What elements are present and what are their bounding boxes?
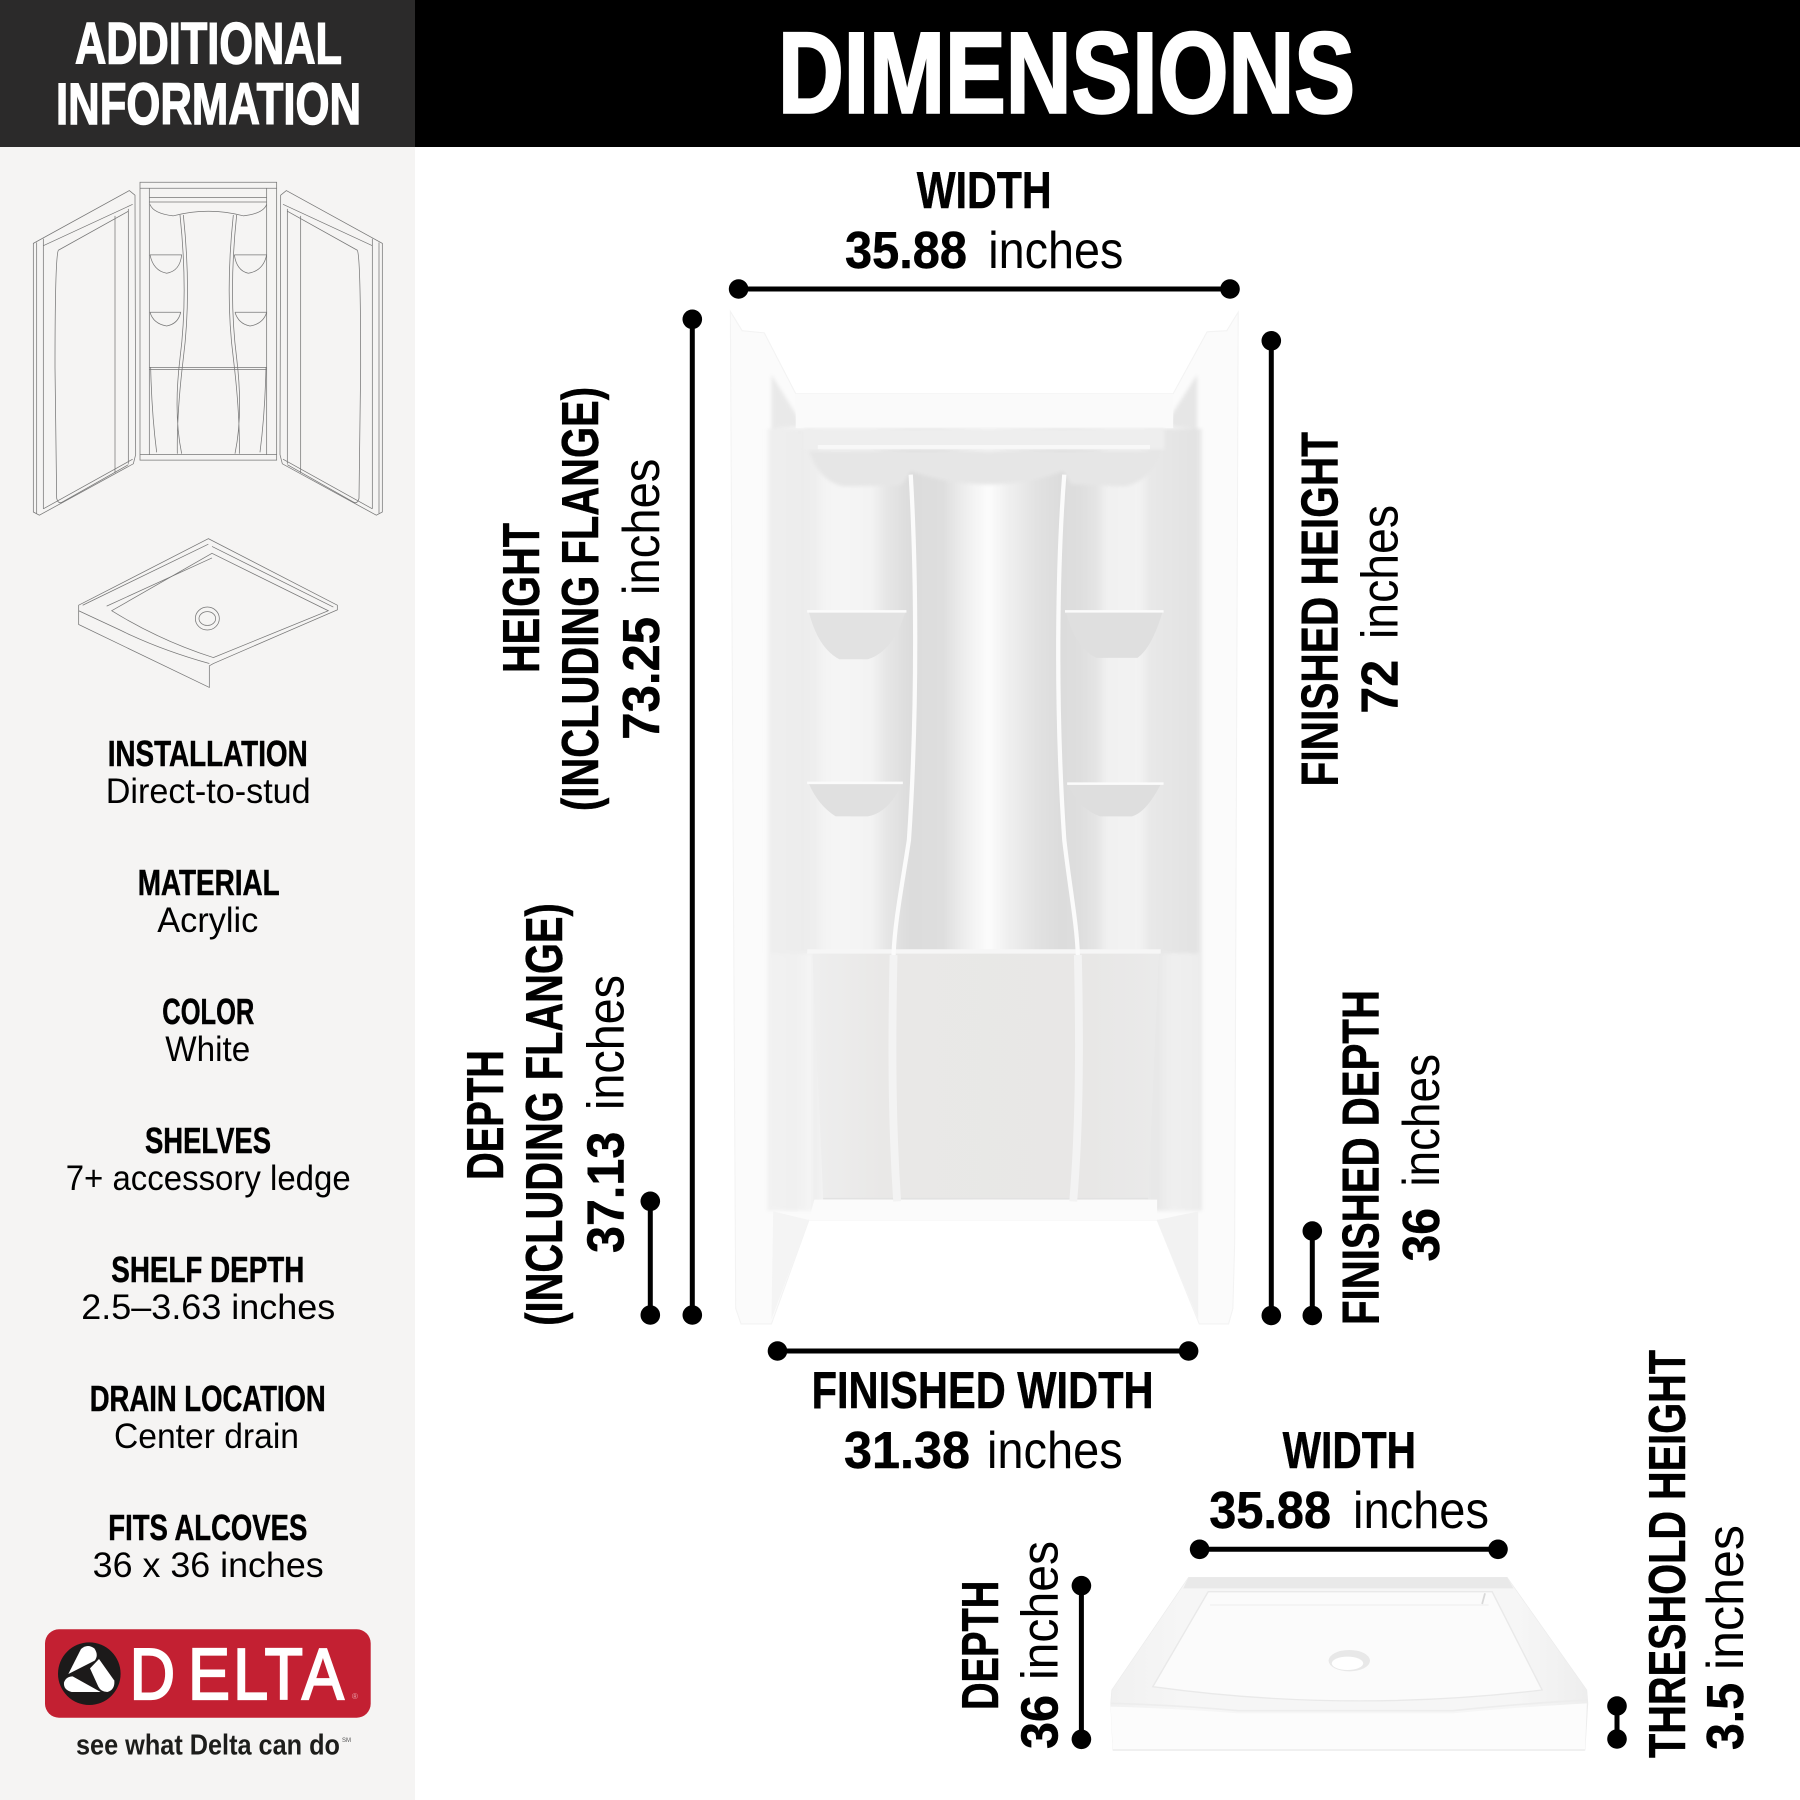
- drain: [1329, 1650, 1370, 1671]
- label: base depth: DEPTH: [952, 1581, 1010, 1710]
- label: width 35.88 inches: WIDTH: [917, 162, 1052, 220]
- line drawing: shower base: [79, 539, 337, 687]
- header: additional information: INFORMATION: [56, 72, 361, 137]
- spec: material: [138, 862, 280, 940]
- delta logo: [45, 1629, 371, 1718]
- spec: fits alcoves: 36 x 36 inches: [93, 1546, 324, 1585]
- dimension line: height including flange: [682, 310, 702, 1325]
- molded seams upper: [894, 475, 1078, 955]
- shelf top edges: [807, 611, 1164, 784]
- spec: shelves: 7+ accessory ledge: [66, 1159, 351, 1198]
- label: base width: [1209, 1422, 1489, 1540]
- label: base width: WIDTH: [1283, 1422, 1416, 1480]
- spec: shelf depth: [81, 1249, 335, 1327]
- dimension line: finished depth: [1302, 1221, 1322, 1325]
- header: additional information: [0, 0, 415, 147]
- lower left shelf: [809, 784, 902, 816]
- upper right shelf: [1066, 612, 1162, 658]
- label: height including flange: [493, 387, 671, 811]
- spec: shelf depth: SHELF DEPTH: [111, 1249, 304, 1290]
- label: depth including flange: (INCLUDING FLANGE): [516, 903, 574, 1326]
- upper left shelf: [809, 612, 905, 659]
- label: width 35.88 inches: 35.88: [845, 222, 967, 280]
- delta logo: ®: [352, 1692, 358, 1701]
- label: threshold height: [1639, 1350, 1755, 1758]
- label: depth including flange: DEPTH: [457, 1050, 515, 1180]
- dimension line: width: [729, 279, 1240, 299]
- dimension line: base width: [1190, 1540, 1508, 1559]
- label: finished depth: [1332, 990, 1451, 1325]
- label: finished width: [812, 1362, 1154, 1480]
- dimension line: base depth: [1072, 1576, 1091, 1749]
- delta logo: DELTA: [130, 1635, 344, 1715]
- spec: fits alcoves: [93, 1507, 324, 1585]
- spec: shelf depth: 2.5–3.63 inches: [81, 1288, 335, 1327]
- label: base depth: 36: [1012, 1695, 1070, 1749]
- spec: installation: INSTALLATION: [108, 733, 308, 774]
- sidebar background: [0, 147, 415, 1800]
- label: finished height: [1291, 432, 1409, 786]
- lower side returns: [771, 1211, 809, 1319]
- line drawing: wall panels: [33, 182, 382, 515]
- spec: shelves: [66, 1120, 351, 1198]
- spec: drain location: DRAIN LOCATION: [90, 1378, 326, 1419]
- label: height including flange: 73.25: [613, 617, 671, 740]
- spec: color: [162, 991, 254, 1069]
- lower wall panel: [812, 953, 1159, 1200]
- dimension line: threshold height: [1607, 1696, 1627, 1749]
- spec: material: MATERIAL: [138, 862, 280, 903]
- spec: fits alcoves: FITS ALCOVES: [108, 1507, 307, 1548]
- spec: installation: [106, 733, 311, 811]
- label: width 35.88 inches: [845, 162, 1123, 280]
- label: depth including flange: [457, 903, 635, 1326]
- shower walls photo: [730, 311, 1238, 1324]
- label: finished depth: inches: [1393, 1054, 1451, 1187]
- label: threshold height: inches: [1697, 1525, 1755, 1670]
- label: base width: 35.88: [1209, 1482, 1331, 1540]
- label: base depth: [952, 1541, 1070, 1749]
- spec: material: Acrylic: [157, 901, 258, 940]
- label: finished width: inches: [987, 1422, 1123, 1480]
- spec: shelves: SHELVES: [145, 1120, 271, 1161]
- dimension line: depth including flange: [640, 1192, 660, 1325]
- lower right shelf: [1068, 784, 1161, 816]
- label: threshold height: 3.5: [1697, 1683, 1755, 1750]
- header: dimensions: [415, 0, 1800, 147]
- label: finished height: 72: [1351, 660, 1409, 714]
- label: finished height: inches: [1351, 505, 1409, 639]
- label: height including flange: inches: [613, 459, 671, 595]
- label: depth including flange: inches: [577, 975, 635, 1110]
- spec: installation: Direct-to-stud: [106, 772, 311, 811]
- label: finished width: FINISHED WIDTH: [812, 1362, 1154, 1420]
- spec: drain location: [90, 1378, 326, 1456]
- label: finished width: 31.38: [844, 1422, 970, 1480]
- label: base width: inches: [1353, 1482, 1489, 1540]
- header: dimensions: DIMENSIONS: [778, 10, 1355, 138]
- dimension line: finished height: [1262, 331, 1281, 1325]
- tagline: see what Delta can do: [76, 1729, 340, 1761]
- label: base depth: inches: [1012, 1541, 1070, 1680]
- label: height including flange: HEIGHT: [493, 523, 551, 673]
- label: finished height: FINISHED HEIGHT: [1291, 432, 1349, 786]
- tagline: SM: [342, 1738, 351, 1744]
- label: threshold height: THRESHOLD HEIGHT: [1639, 1350, 1697, 1758]
- spec: color: White: [165, 1030, 250, 1069]
- header: additional information: ADDITIONAL: [75, 12, 342, 76]
- spec: drain location: Center drain: [114, 1417, 299, 1456]
- label: height including flange: (INCLUDING FLANGE): [552, 387, 610, 811]
- spec: color: COLOR: [162, 991, 254, 1032]
- label: width 35.88 inches: inches: [988, 222, 1123, 280]
- top corner shelf: [809, 451, 1161, 486]
- label: depth including flange: 37.13: [577, 1132, 635, 1253]
- label: finished depth: FINISHED DEPTH: [1332, 990, 1390, 1325]
- dimension line: finished width: [768, 1341, 1198, 1361]
- shower base photo: [1111, 1577, 1588, 1750]
- molded seams lower: [892, 955, 1079, 1201]
- label: finished depth: 36: [1393, 1208, 1451, 1262]
